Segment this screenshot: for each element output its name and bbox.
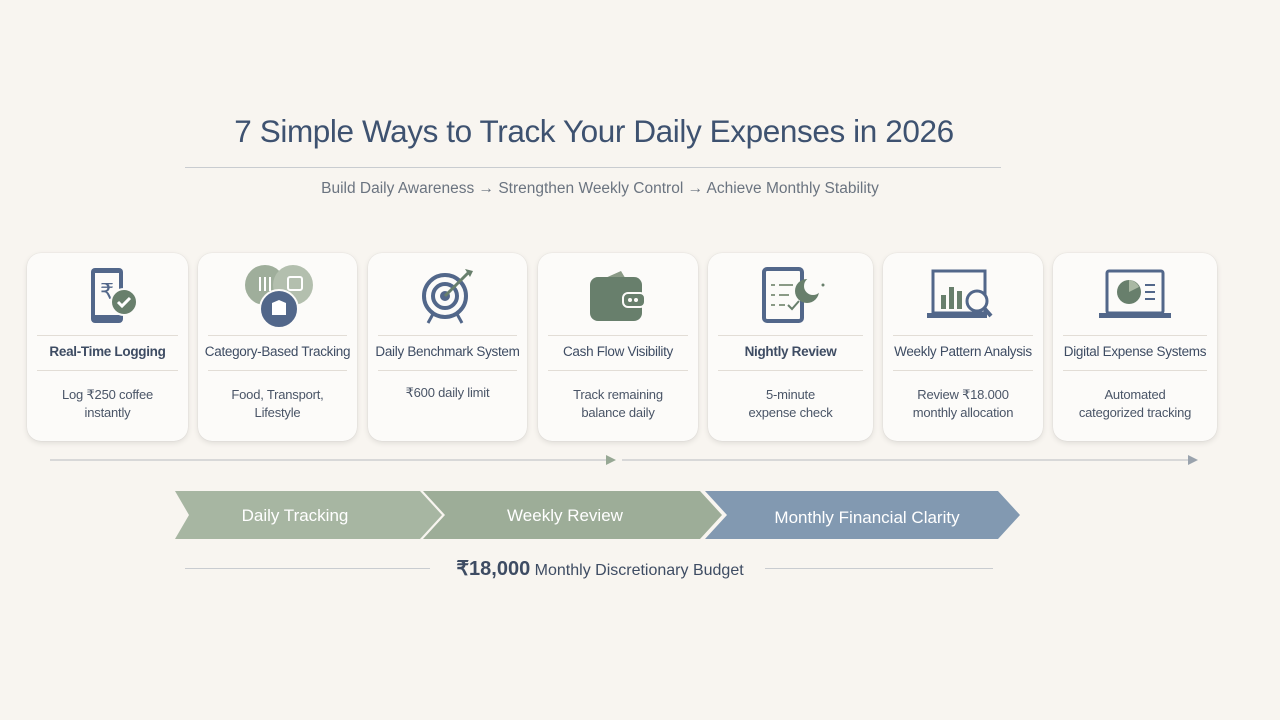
chevron: Monthly Financial Clarity: Monthly Financial Clarity xyxy=(774,508,960,527)
card: Category-Based Tracking xyxy=(198,253,357,441)
chevron: Weekly Review xyxy=(423,491,722,539)
subtitle: Build Daily Awareness → Strengthen Weekly Control → Achieve Monthly Stability xyxy=(321,180,879,197)
card: Real-Time Logging: instantly xyxy=(85,405,130,420)
title: 7 Simple Ways to Track Your Daily Expenses in 2026 xyxy=(234,113,954,149)
budget footer: ₹18,000 Monthly Discretionary Budget xyxy=(456,558,744,580)
card: Cash Flow Visibility: Cash Flow Visibility xyxy=(563,344,673,359)
card: Weekly Pattern Analysis: Weekly Pattern Analysis xyxy=(894,344,1032,359)
icon: phone rupee check xyxy=(91,268,136,323)
card: Weekly Pattern Analysis: monthly allocation xyxy=(913,405,1013,420)
card: Daily Benchmark System: Daily Benchmark System xyxy=(375,344,520,359)
chevron: Daily Tracking: Daily Tracking xyxy=(242,506,348,525)
chevron: Weekly Review: Weekly Review xyxy=(507,506,624,525)
progress chevrons xyxy=(175,491,1020,539)
icon: category circles xyxy=(245,265,313,327)
card: Nightly Review: expense check xyxy=(748,405,833,420)
timeline arrow xyxy=(50,455,1198,465)
card: Nightly Review xyxy=(708,253,873,441)
card: Category-Based Tracking: Lifestyle xyxy=(255,405,300,420)
card: Digital Expense Systems: Digital Expense Systems xyxy=(1064,344,1206,359)
card: Real-Time Logging: Log ₹250 coffee xyxy=(62,387,153,402)
card: Category-Based Tracking: Category-Based Tracking xyxy=(205,344,350,359)
card: Nightly Review: 5-minute xyxy=(766,387,815,402)
icon: wallet xyxy=(590,271,644,321)
card: Category-Based Tracking: Food, Transport, xyxy=(231,387,324,402)
icon: laptop chart magnifier xyxy=(927,270,992,318)
icon: laptop pie chart xyxy=(1099,270,1171,318)
chevron: Daily Tracking xyxy=(175,491,442,539)
card: Cash Flow Visibility xyxy=(538,253,698,441)
card: Daily Benchmark System: ₹600 daily limit xyxy=(406,385,489,400)
icon: clipboard moon xyxy=(762,267,824,323)
card: Real-Time Logging: Real-Time Logging xyxy=(49,344,166,359)
icon: phone rupee check: ₹ xyxy=(100,279,114,304)
card: Digital Expense Systems: categorized tracking xyxy=(1079,405,1191,420)
card: Nightly Review: Nightly Review xyxy=(745,344,836,359)
card: Digital Expense Systems: Automated xyxy=(1104,387,1166,402)
icon: target xyxy=(422,269,473,324)
chevron: Monthly Financial Clarity xyxy=(705,491,1020,539)
card: Weekly Pattern Analysis: Review ₹18.000 xyxy=(917,387,1009,402)
card: Cash Flow Visibility: Track remaining xyxy=(573,387,663,402)
card: Real-Time Logging xyxy=(27,253,188,441)
card: Daily Benchmark System xyxy=(368,253,527,441)
card: Weekly Pattern Analysis xyxy=(883,253,1043,441)
card: Cash Flow Visibility: balance daily xyxy=(581,405,655,420)
card: Digital Expense Systems xyxy=(1053,253,1217,441)
